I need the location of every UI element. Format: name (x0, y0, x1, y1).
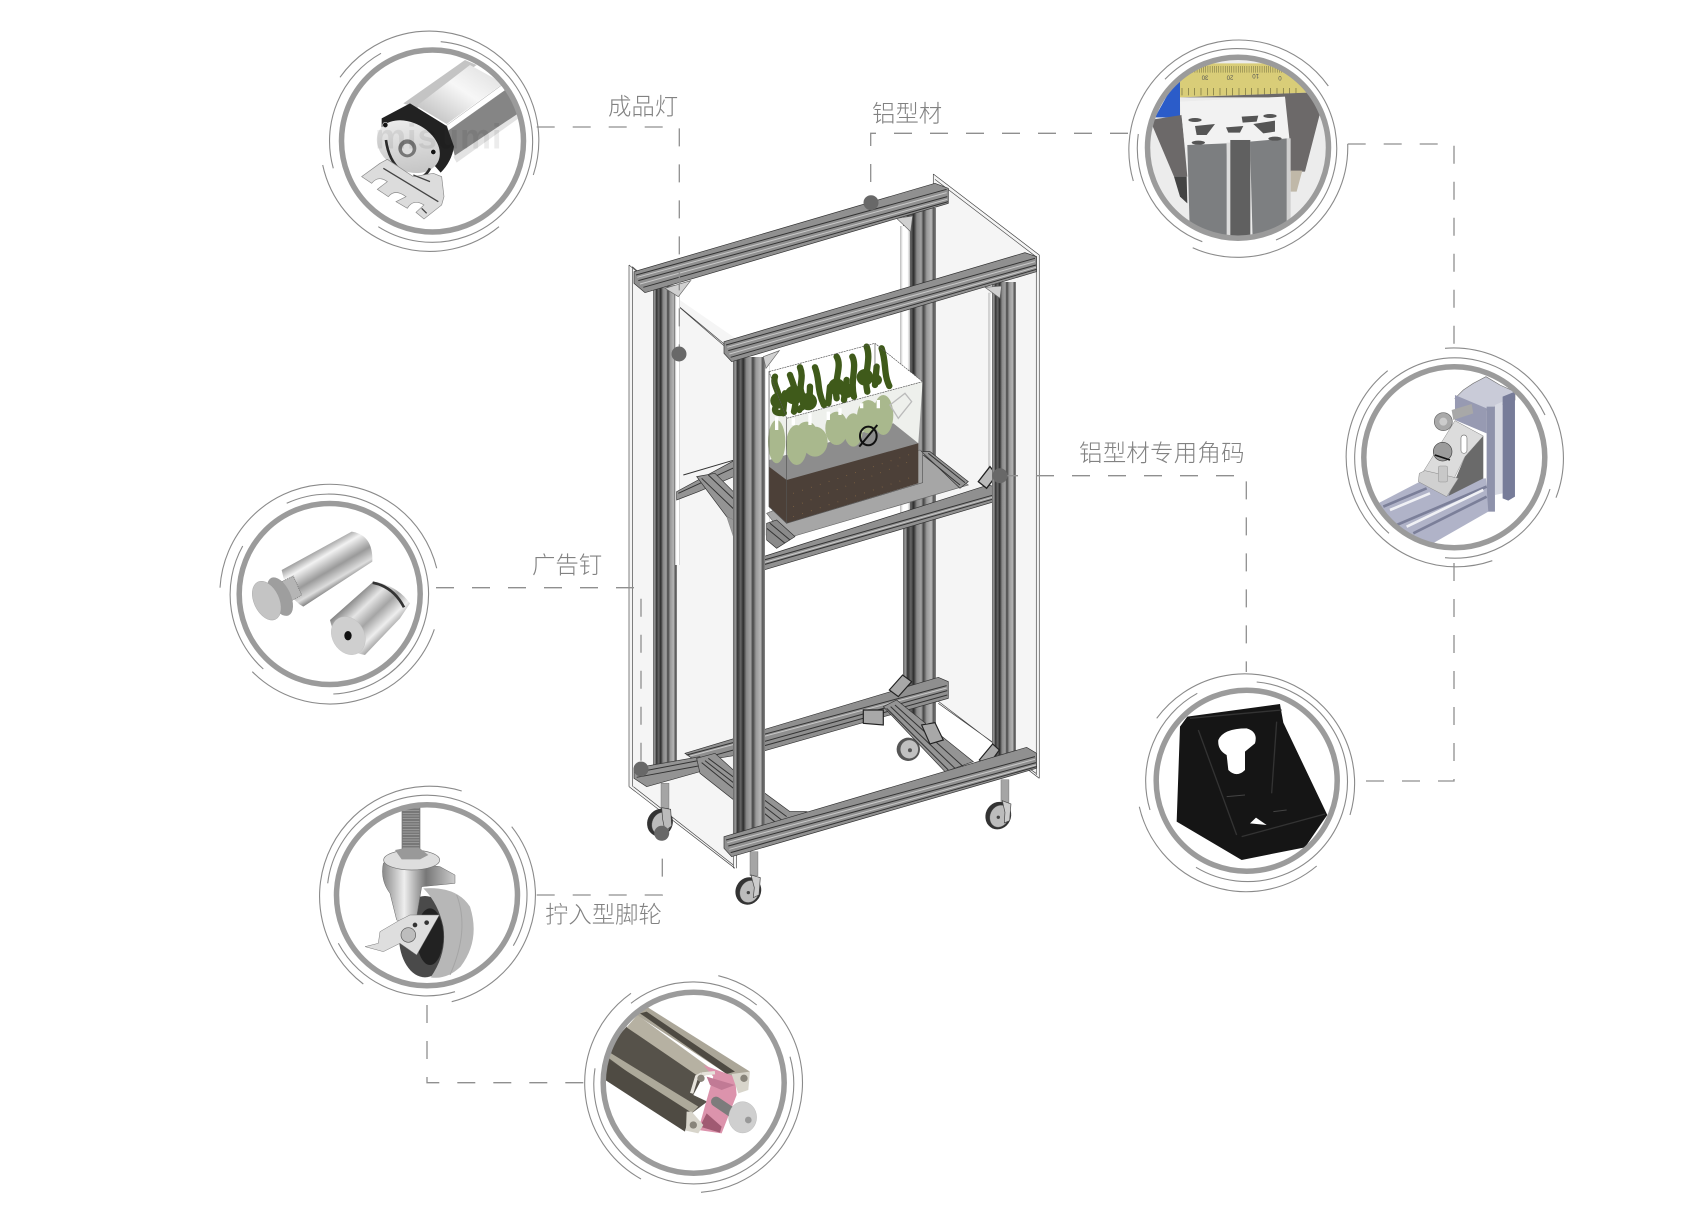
connector: lamp line (537, 127, 679, 354)
rear casters (643, 734, 1016, 841)
callout dots (634, 195, 1008, 841)
central frame illustration (629, 174, 1039, 909)
connector: aluminium profile line (871, 133, 1128, 203)
icon: aluminium profile in caliper: 10 (1252, 72, 1259, 78)
label: finished lamp: 成品灯 (608, 94, 678, 120)
front shelf rail (763, 467, 1000, 570)
icon: standoff nails (220, 484, 437, 704)
icon: aluminium profile in caliper: 0 (1278, 74, 1282, 80)
front upright posts (733, 282, 1016, 839)
middle shelf (677, 450, 968, 548)
tank with plants and soil (768, 343, 923, 523)
icon: aluminium profile in caliper (1129, 40, 1348, 257)
LED tubes (675, 226, 998, 565)
label: aluminium profile: 铝型材 (872, 100, 942, 126)
connector: caster line (537, 833, 662, 895)
connector: corner bracket to black bracket (1356, 563, 1454, 781)
icon: aluminium profile in caliper: 30 (1201, 73, 1208, 79)
connector: caster to profile section (427, 1005, 583, 1083)
label: screw-in caster: 拧入型脚轮 (545, 902, 662, 928)
soil block (769, 443, 918, 523)
top front rail (724, 253, 1037, 362)
front caster (731, 852, 766, 909)
glass side panels (629, 174, 1039, 868)
connector: standoff line (436, 588, 641, 769)
gussets under front rail (763, 286, 1002, 368)
flow symbol (859, 425, 877, 447)
icon: lamp: misumi (375, 117, 502, 156)
gussets under top rails (665, 216, 913, 297)
icon: aluminium profile in caliper: 20 (1226, 73, 1233, 79)
icon: caster wheel (320, 786, 535, 1002)
bottom front rail (724, 747, 1037, 857)
connector: profile to corner bracket (1348, 144, 1454, 347)
top rear rail (634, 183, 948, 293)
connector: bracket line (1000, 476, 1246, 672)
white stems (777, 400, 878, 430)
label: profile corner bracket: 铝型材专用角码 (1079, 440, 1245, 466)
glass box outline (769, 343, 923, 523)
bottom corner brackets (863, 675, 999, 767)
rear upright posts (653, 208, 936, 770)
dark green foliage (774, 347, 889, 413)
icon: aluminium profile section (585, 976, 802, 1192)
icon: lamp (323, 31, 539, 251)
label: standoff nail: 广告钉 (532, 552, 602, 578)
pale submerged foliage (768, 395, 893, 465)
icon: angle bracket on profile (1346, 348, 1563, 567)
bottom frame rails (634, 677, 973, 830)
icon: black corner bracket (1139, 674, 1355, 892)
